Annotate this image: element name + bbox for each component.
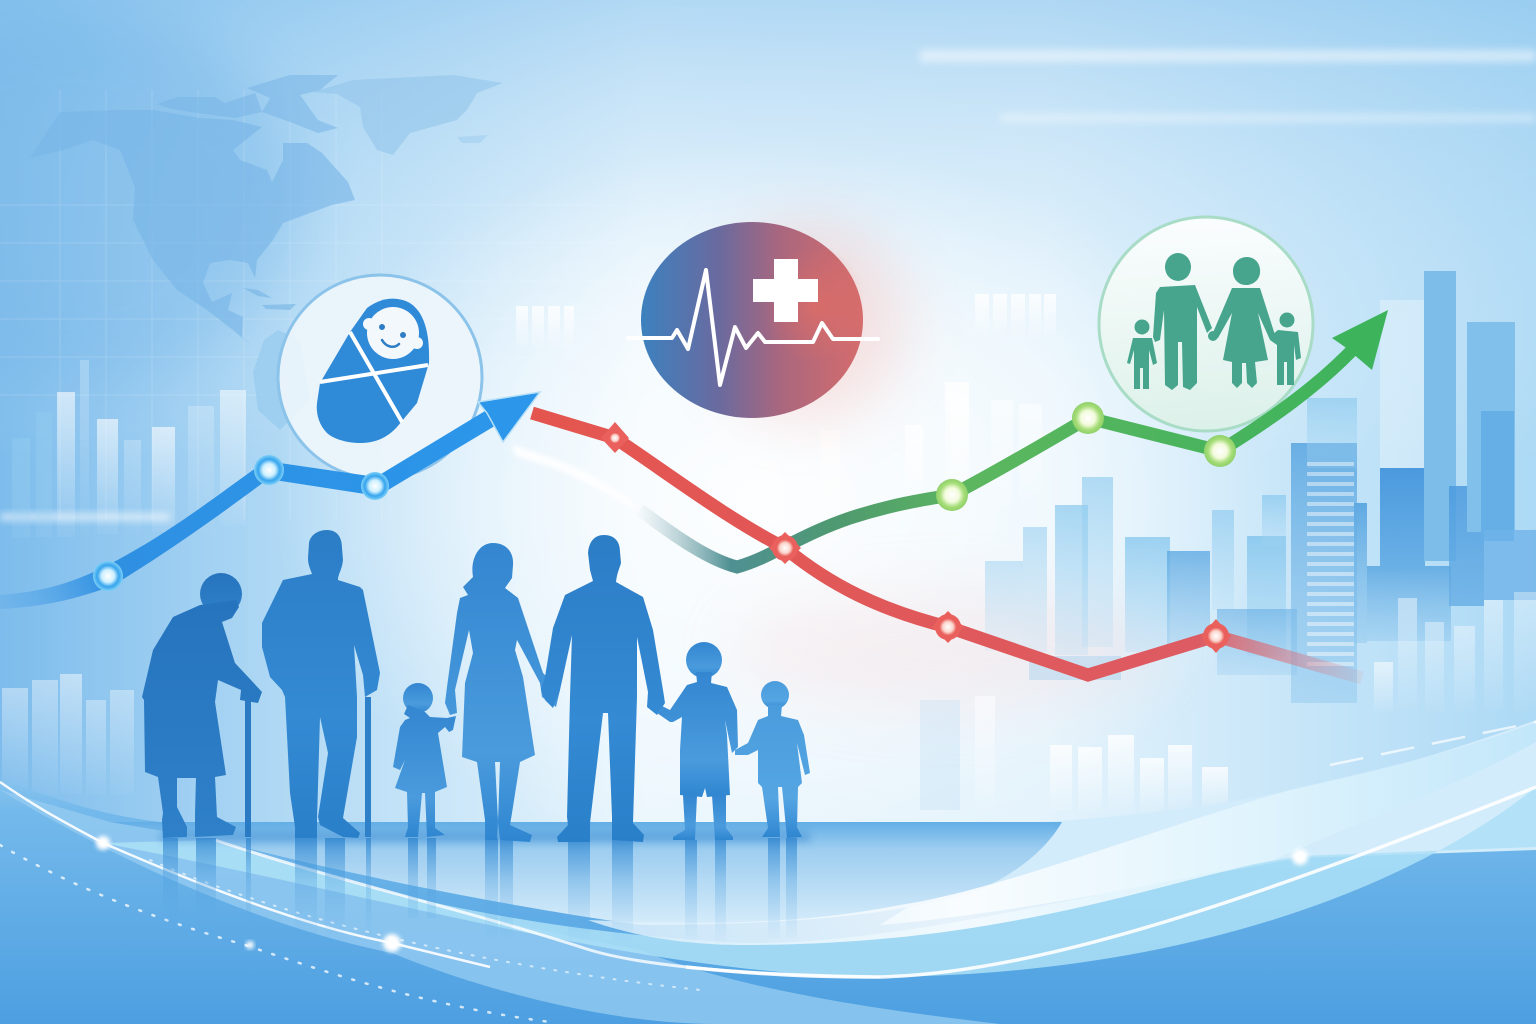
caribbean islands — [243, 288, 296, 310]
boy — [657, 642, 738, 840]
family silhouettes — [142, 530, 810, 842]
walking stick — [365, 697, 371, 837]
blue rising line — [0, 392, 540, 609]
reflective floor — [110, 822, 1062, 925]
south america — [253, 330, 310, 430]
elderly woman — [142, 573, 262, 838]
skyline centre — [512, 294, 1228, 813]
mother — [445, 543, 560, 842]
baby face — [363, 307, 423, 359]
white ribbon — [588, 722, 1536, 945]
world map — [30, 75, 503, 430]
greenland — [313, 75, 503, 155]
small child — [735, 681, 810, 838]
ground shadow — [160, 832, 810, 842]
red falling line — [532, 413, 1362, 678]
people reflection — [163, 838, 797, 948]
arctic islands — [157, 75, 338, 133]
grandfather — [262, 530, 380, 838]
data point markers — [93, 402, 1236, 653]
icon: family in circle — [1099, 217, 1313, 431]
green rising line — [640, 310, 1388, 567]
skyline left — [2, 360, 246, 795]
cane — [245, 700, 251, 837]
floor and waves — [0, 720, 1536, 1024]
blue arrowhead — [478, 392, 540, 442]
girl — [393, 683, 456, 837]
iceland — [457, 135, 488, 143]
icon: health pulse and cross — [628, 220, 905, 420]
skyline right — [950, 271, 1536, 712]
pale upper wave — [880, 720, 1536, 925]
north america — [30, 110, 355, 347]
green arrowhead — [1332, 310, 1388, 370]
icon: swaddled baby — [278, 275, 482, 479]
light band — [0, 790, 1000, 1024]
father — [541, 535, 665, 842]
